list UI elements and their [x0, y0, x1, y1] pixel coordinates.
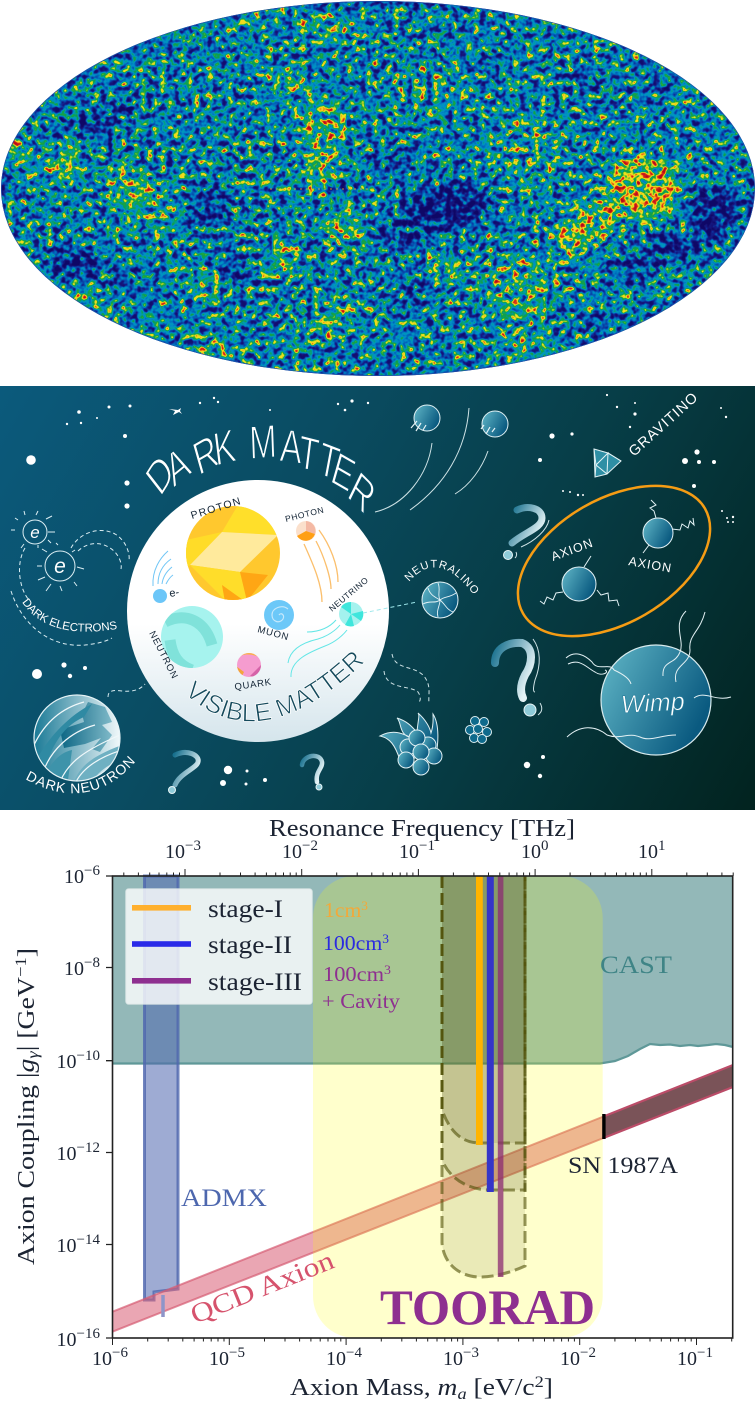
panel: cosmic microwave background sky map	[0, 0, 755, 380]
icon: axion right	[627, 500, 694, 576]
y-axis tick labels: −6	[84, 863, 100, 879]
icon: wimp: Wimp	[620, 688, 685, 719]
neutron	[146, 606, 223, 681]
quark	[234, 653, 272, 692]
x-axis tick labels: −6	[112, 1345, 128, 1361]
label: 100cm3 + Cavity: 3	[384, 962, 391, 977]
bar: stage-III	[498, 876, 503, 1277]
legend: stage-I	[208, 896, 283, 923]
muon: MUON	[256, 624, 290, 643]
y-axis tick labels: −8	[84, 955, 100, 971]
axis title: bottom: 2	[535, 1374, 544, 1391]
small plane-like star	[169, 408, 182, 415]
label: TOORAD: TOORAD	[380, 1279, 595, 1335]
label: 100cm3: 3	[382, 931, 389, 946]
icon: dark electrons: DARK ELECTRONS	[22, 598, 117, 632]
proton: PROTON	[189, 495, 243, 522]
icon: question mark small right	[302, 756, 322, 790]
icon: dark electrons: e	[54, 555, 66, 578]
icon: wimp	[566, 611, 731, 755]
icon: question mark upper	[504, 508, 549, 560]
top-axis tick labels: 10	[521, 841, 541, 863]
y-axis tick labels: 10	[57, 1235, 77, 1257]
top-axis tick labels: 10	[399, 841, 419, 863]
x-axis tick labels: 10	[443, 1348, 463, 1370]
heading: visible matter	[184, 655, 372, 721]
label: ADMX: ADMX	[181, 1185, 267, 1212]
icon: raspberry cluster	[380, 713, 442, 775]
region: CAST exclusion	[112, 876, 733, 1064]
region: QCD axion band	[112, 1065, 733, 1332]
icon: small cluster	[466, 716, 492, 744]
label: SN 1987A: SN 1987A	[568, 1153, 678, 1178]
icon: axion right: AXION	[627, 554, 673, 576]
top-axis tick labels: −1	[419, 838, 435, 854]
electron: e-	[168, 586, 180, 600]
bar: stage-II	[487, 876, 494, 1192]
top-axis tick labels	[165, 838, 666, 863]
top-axis tick labels: 1	[658, 838, 666, 854]
legend: stage-III	[208, 969, 302, 996]
neutrino: NEUTRINO	[327, 575, 370, 614]
icon: gravitino crystal	[594, 389, 702, 477]
icon: arcs and two spheres	[375, 405, 508, 512]
bar: stage-I	[476, 876, 483, 1145]
icon: dashed squiggles	[384, 654, 429, 703]
y-axis tick labels: −12	[77, 1140, 100, 1156]
legend: stage-II	[208, 932, 292, 959]
x-axis tick labels: −3	[463, 1345, 479, 1361]
y-axis tick labels: −16	[77, 1326, 100, 1342]
heading: DARK MATTER: DARK MATTER	[138, 414, 382, 524]
axis title: left: −1	[13, 957, 30, 977]
label: QCD Axion: QCD Axion	[186, 1245, 339, 1330]
planet: visible matter disc	[127, 480, 389, 742]
label: 1cm3: 1cm	[324, 898, 360, 922]
label: 100cm3: 100cm	[323, 931, 380, 955]
top-axis tick labels: 0	[541, 838, 548, 854]
axes frame and ticks	[68, 869, 755, 1345]
x-axis tick labels: −4	[346, 1345, 362, 1361]
icon: neutralino: NEUTRALINO	[404, 560, 478, 593]
axis title: bottom: a	[457, 1386, 467, 1403]
muon	[256, 600, 294, 643]
x-axis tick labels: −2	[580, 1345, 596, 1361]
top-axis tick labels: −2	[302, 838, 318, 854]
axis title: left: ]	[14, 948, 40, 957]
y-axis tick labels: 10	[64, 958, 84, 980]
marker: SN 1987A limit	[602, 1114, 606, 1139]
axis title: left: Axion Coupling |g	[14, 1061, 40, 1265]
x-axis tick labels: 10	[677, 1348, 697, 1370]
y-axis tick labels: −14	[77, 1232, 100, 1248]
axis title: left: γ	[25, 1050, 42, 1059]
icon: question mark large	[495, 639, 542, 716]
icon: question mark small left	[168, 753, 198, 794]
icon: axion left	[540, 536, 619, 606]
x-axis tick labels: 10	[92, 1348, 112, 1370]
label: 100cm3 + Cavity: 100cm	[323, 962, 380, 986]
electron	[153, 551, 180, 603]
y-axis tick labels: 10	[57, 1051, 77, 1073]
callout: axion orange ellipse	[492, 455, 736, 667]
axis title: bottom: [eV/c	[467, 1375, 535, 1401]
x-axis tick labels: 10	[326, 1348, 346, 1370]
axis title: left: | [GeV	[14, 976, 40, 1051]
x-axis tick labels	[92, 1345, 713, 1370]
top-axis tick labels: 10	[638, 841, 658, 863]
neutrino	[288, 575, 370, 677]
star dots	[26, 394, 734, 786]
neutron: NEUTRON	[146, 629, 180, 681]
axis title: bottom: Axion Mass, m	[290, 1375, 455, 1401]
top-axis tick labels: −3	[185, 838, 201, 854]
planet: visible matter disc: VISIBLE MATTER	[189, 652, 364, 722]
axis title: top: Resonance Frequency [THz]	[269, 816, 575, 842]
icon: dark electrons: e	[30, 523, 40, 542]
top-axis tick labels: 10	[165, 841, 185, 863]
y-axis tick labels: −10	[77, 1048, 100, 1064]
x-axis tick labels: 10	[209, 1348, 229, 1370]
y-axis tick labels	[57, 863, 100, 1351]
legend	[126, 889, 312, 1004]
label: 1cm3: 3	[361, 898, 368, 913]
panel: axion parameter space chart	[13, 816, 755, 1403]
region: TOORAD projected sensitivity	[442, 876, 525, 1277]
top-axis tick labels: 10	[282, 841, 302, 863]
quark: QUARK	[234, 677, 272, 693]
icon: dark electrons	[10, 510, 130, 646]
label: CAST: CAST	[600, 952, 672, 979]
icon: gravitino crystal: GRAVITINO	[626, 389, 702, 460]
proton	[186, 497, 280, 600]
photon: PHOTON	[284, 505, 325, 524]
axis title: bottom: ]	[544, 1375, 553, 1401]
region: ADMX exclusion	[144, 876, 178, 1300]
icon: dark neutron	[26, 684, 146, 794]
icon: dark neutron: DARK NEUTRON	[26, 756, 135, 794]
label: 100cm3 + Cavity: + Cavity	[322, 989, 401, 1013]
icon: neutralino	[362, 560, 478, 618]
y-axis tick labels: 10	[57, 1329, 77, 1351]
x-axis tick labels: −1	[697, 1345, 713, 1361]
x-axis tick labels: 10	[560, 1348, 580, 1370]
region: TOORAD yellow window	[313, 876, 603, 1338]
y-axis tick labels: 10	[57, 1143, 77, 1165]
icon: axion left: AXION	[549, 536, 595, 564]
panel: dark matter illustration	[0, 386, 755, 810]
label: 100cm3 + Cavity	[322, 962, 401, 1013]
x-axis tick labels: −5	[229, 1345, 245, 1361]
y-axis tick labels: 10	[64, 866, 84, 888]
photon	[284, 505, 338, 602]
